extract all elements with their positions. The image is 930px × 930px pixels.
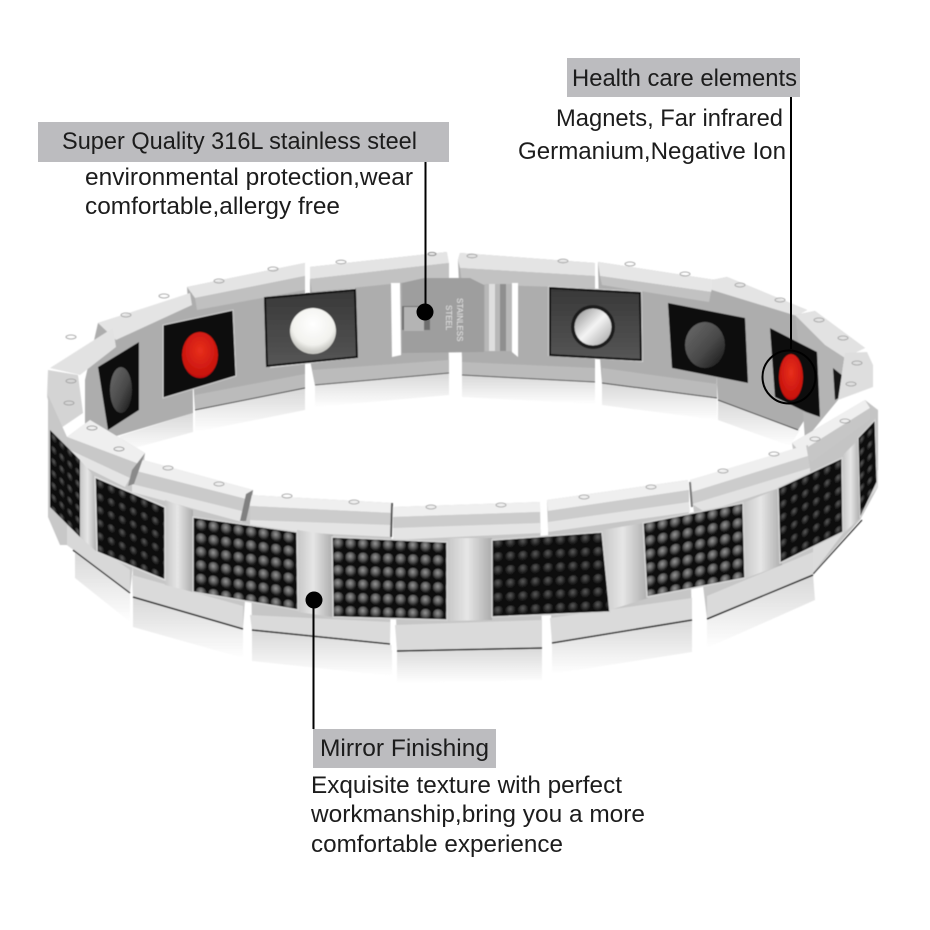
back link F	[598, 262, 717, 398]
panel: red bead right	[770, 328, 820, 417]
fold-over clasp	[402, 278, 512, 353]
back link B	[187, 263, 305, 410]
panel: red bead	[163, 310, 236, 398]
back link G	[712, 277, 830, 430]
text block: health care description: Magnets, Far infrared	[556, 105, 783, 132]
panel: sliver right	[833, 368, 843, 400]
mesh panel 1	[50, 430, 80, 537]
front row: silver links	[48, 395, 878, 651]
callout: health care elements	[518, 58, 816, 404]
front link 4	[250, 494, 392, 644]
front link 1	[48, 395, 85, 545]
front link 8	[792, 400, 878, 574]
text block: health care description	[518, 105, 786, 165]
mesh panel 2	[95, 477, 165, 580]
front link 5	[393, 502, 542, 651]
leader line and dot: clasp	[416, 162, 434, 320]
clasp engraving: STAINLESS	[455, 298, 464, 341]
text block: mirror finishing description: comfortable experience	[311, 831, 563, 858]
left end cap	[47, 328, 116, 430]
front link 6	[547, 480, 692, 643]
mesh panel 7	[778, 458, 843, 563]
mesh panel 5	[492, 532, 610, 617]
callout: stainless steel	[38, 122, 449, 320]
callout: mirror finishing	[306, 592, 645, 858]
front link 7	[690, 445, 813, 619]
panel: grey glass bead	[668, 303, 748, 383]
front columns: polished uprights	[80, 440, 860, 621]
heading bar: Super Quality 316L stainless steel: Super Quality 316L stainless steel	[62, 128, 417, 155]
front mesh panels	[50, 420, 877, 620]
panel: white ceramic bead	[265, 288, 358, 368]
leader line and ring: red bead	[762, 97, 816, 404]
front link 2	[67, 420, 145, 593]
link seams	[128, 453, 700, 650]
back end caps	[47, 328, 873, 430]
heading bar: Health care elements: Health care elements	[572, 65, 797, 92]
bracelet photo illustration	[47, 252, 878, 683]
back row: silver links	[85, 252, 865, 440]
right end cap	[838, 352, 873, 400]
text block: stainless steel description	[85, 164, 413, 220]
heading bar: Mirror Finishing: Mirror Finishing	[320, 735, 489, 762]
text block: mirror finishing description: workmanship,bring you a more	[310, 801, 645, 828]
text block: mirror finishing description	[310, 772, 645, 858]
text block: stainless steel description: comfortable,allergy free	[85, 193, 340, 220]
back link H	[795, 311, 865, 440]
fold-over clasp: STEEL	[444, 305, 453, 331]
heading bar: Mirror Finishing	[313, 729, 496, 768]
reflections under bracelet	[75, 373, 815, 683]
back link A	[310, 252, 449, 385]
back panels and therapy beads	[98, 286, 843, 430]
front link 3	[132, 460, 253, 629]
heading bar: Health care elements	[567, 58, 800, 97]
mesh panel 6	[643, 503, 745, 597]
mesh panel 3	[193, 517, 298, 610]
back link C	[85, 293, 193, 437]
heading bar: Super Quality 316L stainless steel	[38, 122, 449, 162]
mesh panel 4	[332, 537, 447, 620]
text block: health care description: Germanium,Negative Ion	[518, 138, 786, 165]
back link E	[458, 253, 595, 382]
leader line and dot: polished link	[306, 592, 322, 729]
text block: mirror finishing description: Exquisite texture with perfect	[311, 772, 622, 799]
clasp windows	[391, 283, 518, 357]
panel: magnet bead	[548, 286, 643, 362]
mesh panel 8	[858, 420, 877, 518]
text block: stainless steel description: environmental protection,wear	[85, 164, 413, 191]
panel: grey bead left	[98, 342, 139, 430]
